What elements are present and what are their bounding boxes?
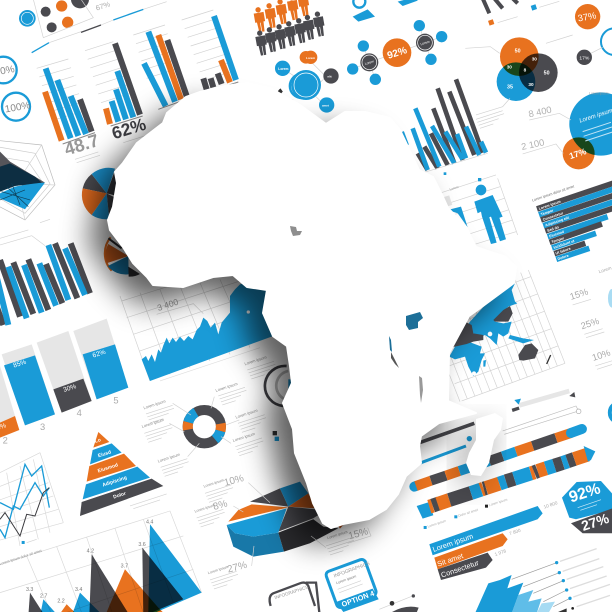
labelled arrow bars: 1 978	[494, 548, 507, 557]
triangle chart: 4.4	[146, 519, 153, 525]
stacked column chart: 4	[77, 408, 82, 418]
panel: top-right charts	[291, 0, 612, 308]
stacked column chart: 30%	[62, 383, 77, 394]
blue and orange circles with stats: Lorem ipsum	[589, 91, 609, 95]
info card option 4	[325, 558, 379, 612]
stat text column lower: 25%	[580, 316, 600, 331]
pyramid: Eiusmod	[97, 462, 119, 474]
network diagram left part	[275, 51, 315, 122]
network diagram right part: amet	[322, 104, 329, 108]
bar chart three series	[133, 25, 188, 109]
pie callouts: Lorem ipsum	[194, 503, 215, 514]
15% callout	[311, 526, 371, 555]
3D pie chart	[227, 482, 343, 557]
labelled arrow bars: Consectetur	[440, 558, 481, 580]
pie callouts	[194, 473, 270, 589]
horizontal bar panel	[532, 182, 612, 261]
stat hexagon badges: 92%	[567, 480, 603, 506]
bar chart 62%	[85, 42, 148, 143]
area chart grid	[120, 266, 263, 381]
triangle chart	[26, 519, 202, 612]
stripe legend: Dolor sit amet	[458, 508, 479, 518]
pie callouts: Lorem ipsum	[207, 565, 229, 575]
stacked column chart: 5	[113, 395, 119, 405]
panel: lower-right charts	[306, 316, 612, 612]
triangle chart grid	[0, 511, 202, 612]
labelled arrow bars: Lorem ipsum	[431, 532, 474, 554]
donut callouts: Lorem ipsum	[157, 452, 181, 464]
horizontal bar panel: Tempor	[540, 208, 555, 217]
venn diagram: 50	[544, 71, 550, 77]
blue and orange circles with stats: 8 400	[528, 105, 553, 119]
shadow of Africa	[88, 104, 496, 545]
network diagram right part: Lorem	[306, 56, 315, 60]
progress rings: 100%	[4, 100, 31, 116]
venn diagram: 30	[532, 57, 537, 62]
labelled arrow bars: Sit amet	[436, 551, 464, 569]
striped bar 2	[417, 446, 595, 519]
top people and legend	[483, 0, 559, 26]
triangle chart: 3.7	[121, 564, 128, 570]
stacked column chart: 2	[3, 435, 8, 445]
stripe legend: Lorem ipsum	[488, 497, 508, 507]
stat text column upper	[569, 265, 612, 308]
bar chart 62%: 62%	[109, 114, 148, 143]
pie callouts: 8%	[212, 498, 229, 513]
stat hexagon badges: 27%	[579, 510, 611, 534]
stacked column chart	[0, 319, 128, 445]
bar chart left multi-series	[0, 230, 90, 325]
pyramid	[80, 432, 167, 516]
map: Africa silhouette	[108, 83, 516, 528]
info card option 4: Lorem ipsum	[336, 574, 357, 585]
venn diagram: 50	[515, 49, 521, 55]
donut callouts	[141, 354, 275, 476]
stat circles top right: 37%	[577, 10, 597, 24]
horizontal bar panel: Tempor	[551, 236, 565, 244]
donut chart	[169, 397, 239, 457]
node cluster 92%: Lorem	[420, 40, 430, 46]
triangle chart grid: Lorem ipsum dolor sit amet	[0, 549, 42, 566]
pie callouts: 27%	[226, 560, 249, 576]
panel: lower-left charts	[0, 266, 343, 612]
horizontal bar panel: Dolore	[557, 254, 569, 261]
triangle chart: 4.2	[87, 549, 94, 555]
node cluster 92%	[347, 20, 447, 85]
stacked column chart: 3	[40, 422, 45, 432]
person chart: Lorem	[449, 185, 459, 192]
pie chart left	[82, 168, 120, 219]
world map	[423, 270, 565, 402]
option card dark: INFOGRAPHICS	[274, 585, 309, 600]
stat text column lower: 10%	[591, 348, 612, 363]
info card option 4: INFOGRAPHICS	[333, 561, 371, 580]
donut callouts: Lorem ipsum	[235, 408, 259, 420]
donut callouts: Lorem ipsum	[244, 354, 268, 366]
pyramid: Adipiscing	[102, 475, 128, 488]
horizontal bar panel: Incididunt ut	[553, 239, 576, 250]
bottom timeline	[306, 583, 419, 612]
pyramid: Dolor	[113, 491, 127, 501]
horizontal bar panel: Adipiscing elit	[545, 215, 570, 228]
line chart	[0, 453, 63, 546]
bar chart 48.7	[37, 59, 101, 163]
bar chart centre	[403, 79, 488, 175]
horizontal bar panel: Lorem ipsum	[538, 199, 562, 211]
half-hidden gauge and legend	[265, 366, 292, 441]
stat hexagon badges	[562, 480, 612, 534]
15% callout: 15%	[347, 526, 370, 542]
triangle chart: 2.7	[40, 594, 47, 600]
horizontal bar panel: Sed do	[547, 225, 560, 233]
horizontal bar panel: Lorem ipsum dolor sit amet	[532, 184, 575, 203]
stripe legend	[424, 497, 508, 529]
labelled arrow bars: 10 800	[543, 500, 558, 510]
people pictograms	[253, 0, 311, 56]
panel: top-left charts	[0, 0, 315, 325]
venn diagram: 30	[528, 82, 534, 87]
node cluster 92%: 92%	[386, 45, 409, 62]
horizontal bar panel: Ut labore	[555, 247, 571, 256]
triangle chart: 3.3	[26, 587, 33, 593]
slider	[512, 391, 575, 412]
bar chart small bars	[182, 10, 238, 93]
stat text column lower	[580, 316, 612, 421]
circle cluster top left	[19, 0, 167, 53]
stat text column upper: Lorem	[598, 265, 612, 274]
icon: blue user badge	[353, 0, 418, 22]
pie callouts: Lorem ipsum	[203, 478, 224, 489]
area chart	[142, 278, 273, 381]
donut callouts: Lorem ipsum	[215, 381, 239, 393]
donut callouts: Lorem ipsum	[141, 417, 165, 429]
map: lakes	[290, 226, 423, 403]
blue and orange circles with stats	[520, 91, 612, 169]
venn diagram: 30	[507, 65, 512, 70]
progress rings	[0, 57, 31, 121]
shadow of Madagascar	[458, 423, 495, 486]
triangle chart: 3.6	[138, 542, 146, 548]
long dark and blue bars	[418, 406, 581, 463]
stacked column chart: 85%	[12, 359, 27, 370]
pie chart with ring	[105, 237, 140, 277]
stacked column chart: 62%	[92, 349, 107, 360]
radar chart	[0, 140, 55, 223]
venn diagram	[465, 35, 573, 128]
donut callouts: Lorem ipsum	[143, 398, 167, 410]
option card dark	[270, 583, 315, 606]
people pictograms continued	[302, 11, 326, 40]
blue and orange circles with stats: 2 100	[520, 137, 545, 152]
stat circles top right	[575, 4, 612, 65]
info card option 4: OPTION 4	[340, 588, 376, 609]
layered blue shapes and stat list	[475, 549, 610, 612]
network diagram left part: Lorem	[278, 67, 289, 71]
network diagram right part	[291, 51, 339, 113]
labelled arrow bars: 7 800	[509, 528, 522, 536]
horizontal bar panel: Consectetur	[542, 211, 564, 222]
person chart	[439, 175, 518, 245]
stat text column upper: 15%	[569, 287, 589, 302]
blue and orange circles with stats: 17%	[568, 146, 588, 161]
area chart grid: 3 400	[156, 297, 180, 313]
pie callouts: 10%	[223, 473, 245, 489]
map: Madagascar	[466, 413, 503, 476]
horizontal bar panel: Eiusmod	[549, 230, 565, 239]
network diagram right part: elit	[327, 74, 332, 78]
node cluster 92%: Lorem	[364, 59, 375, 66]
donut callouts: Lorem ipsum	[232, 431, 256, 443]
bar chart 48.7: 48.7	[62, 130, 101, 159]
stat circles top right: 17%	[579, 55, 590, 61]
striped bar 1	[414, 429, 582, 487]
labelled arrow bars	[429, 500, 558, 580]
pyramid: Lo	[94, 437, 102, 445]
triangle chart: 2.2	[57, 599, 65, 605]
venn diagram: 8	[524, 67, 527, 72]
pyramid: Eiusd	[97, 449, 112, 459]
triangle chart: 3.4	[75, 587, 82, 593]
venn diagram: 35	[507, 85, 513, 91]
15% callout: Lorem ipsum	[327, 530, 348, 540]
stripe legend: Lorem ipsum	[427, 519, 447, 529]
